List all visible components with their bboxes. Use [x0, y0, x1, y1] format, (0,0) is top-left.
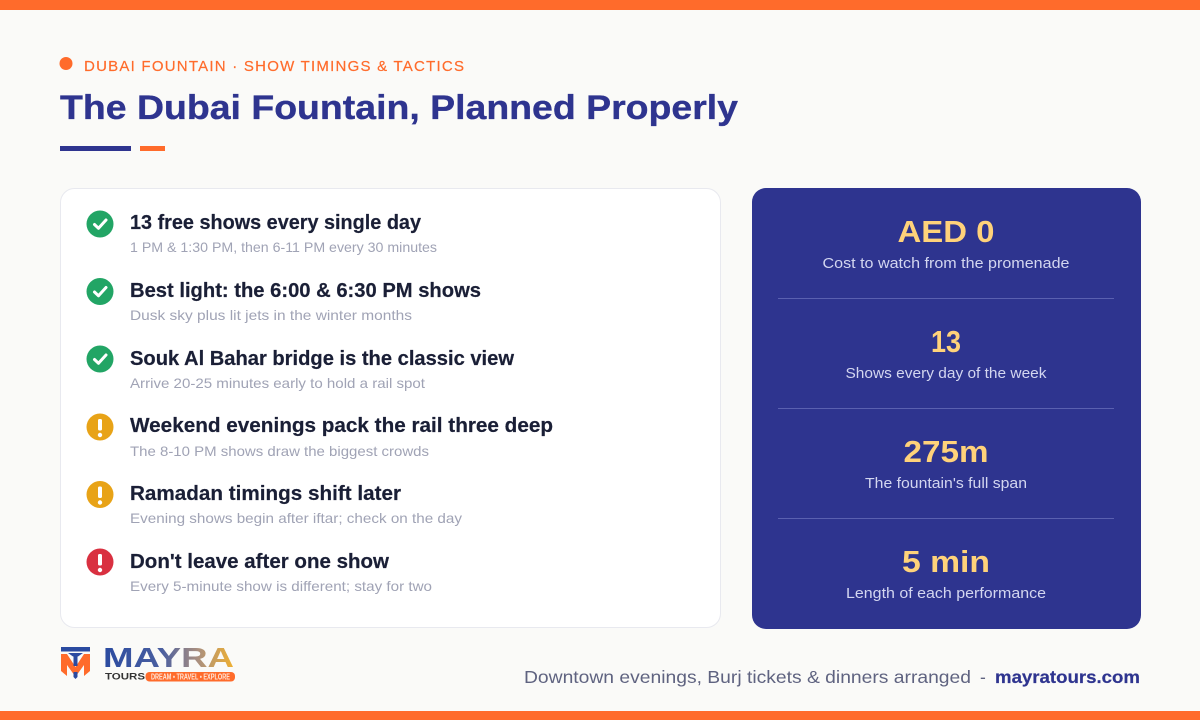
item: weekend evenings: Weekend evenings pack the rail three deep	[130, 415, 553, 437]
stat: span	[865, 434, 1027, 492]
item: best light: Dusk sky plus lit jets in the winter months	[130, 307, 412, 323]
top accent bar	[0, 0, 1200, 10]
footer note: mayratours.com	[995, 667, 1140, 687]
logo: MAYRA	[103, 642, 234, 673]
item: weekend evenings	[86, 414, 553, 459]
bottom accent bar	[0, 711, 1200, 720]
stat: cost: Cost to watch from the promenade	[822, 255, 1070, 272]
stat: shows: 13	[931, 324, 961, 359]
title underline	[60, 146, 165, 151]
item: Souk Al Bahar: Arrive 20-25 minutes early to hold a rail spot	[130, 375, 425, 391]
panel: checklist	[60, 188, 720, 628]
panel: key figures	[752, 188, 1141, 629]
item: 13 free shows: 13 free shows every single day	[130, 212, 422, 234]
stat: shows	[846, 324, 1047, 382]
item: 13 free shows	[86, 210, 437, 255]
footer note: -	[980, 667, 986, 687]
item: Ramadan timings: Ramadan timings shift later	[130, 483, 401, 505]
item: Souk Al Bahar: Souk Al Bahar bridge is the classic view	[130, 348, 514, 370]
stat: span: 275m	[904, 434, 988, 469]
eyebrow: DUBAI FOUNTAIN · SHOW TIMINGS & TACTICS	[84, 58, 464, 75]
logo: DREAM • TRAVEL • EXPLORE	[151, 673, 230, 682]
item: Ramadan timings	[86, 481, 462, 526]
stat: length	[846, 544, 1046, 602]
item: weekend evenings: The 8-10 PM shows draw the biggest crowds	[130, 443, 429, 459]
item: Ramadan timings: Evening shows begin after iftar; check on the day	[130, 510, 462, 526]
stat: length: 5 min	[902, 544, 990, 579]
item: don't leave: Don't leave after one show	[130, 551, 389, 573]
stat: span: The fountain's full span	[865, 475, 1027, 492]
logo	[61, 642, 235, 682]
stat: cost	[822, 214, 1070, 272]
stat: length: Length of each performance	[846, 585, 1046, 602]
item: 13 free shows: 1 PM & 1:30 PM, then 6-11 PM every 30 minutes	[130, 239, 437, 255]
item: Souk Al Bahar	[86, 346, 514, 391]
stat: cost: AED 0	[898, 214, 994, 249]
item: best light	[86, 278, 481, 323]
footer note: Downtown evenings, Burj tickets & dinners arranged	[524, 667, 971, 687]
title: The Dubai Fountain, Planned Properly	[60, 89, 738, 127]
logo: TOURS	[105, 672, 145, 682]
stat: shows: Shows every day of the week	[846, 365, 1047, 382]
item: don't leave	[86, 548, 432, 594]
icon: MT monogram	[61, 647, 90, 679]
item: don't leave: Every 5-minute show is different; stay for two	[130, 578, 432, 594]
footer note	[524, 667, 1140, 687]
item: best light: Best light: the 6:00 & 6:30 PM shows	[130, 280, 481, 302]
